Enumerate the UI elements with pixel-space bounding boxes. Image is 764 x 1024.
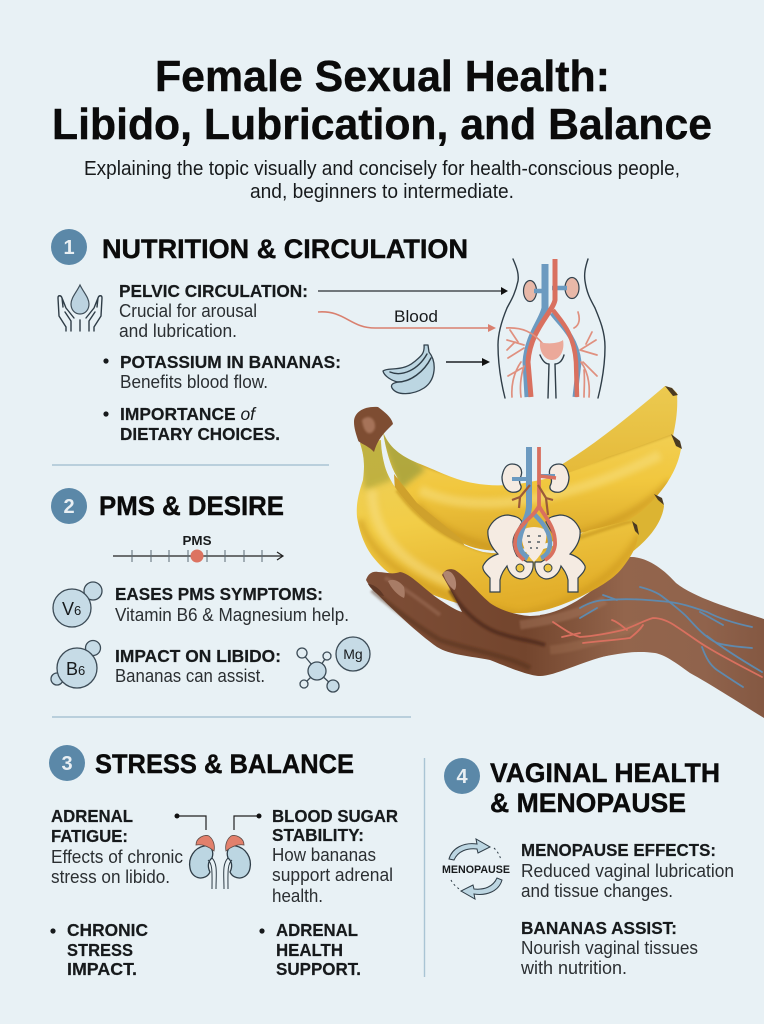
text: impact on libido: IMPACT ON LIBIDO: [115, 646, 281, 666]
text: adrenal fatigue [51, 806, 183, 887]
divider [424, 758, 426, 977]
subtitle: Explaining the topic visually and concisely for health-conscious people, [84, 158, 680, 180]
icon: magnesium molecule: Mg [343, 646, 363, 662]
timeline: pms marker: PMS [182, 533, 212, 548]
hand holding bananas [354, 386, 764, 718]
icon: vitamin V6: V6 [62, 599, 81, 619]
banana tips [665, 386, 678, 396]
arrow: banana to anatomy [446, 358, 490, 366]
text: pelvic circulation [119, 281, 308, 341]
section number 1: 1 [63, 237, 75, 259]
subtitle: and, beginners to intermediate. [250, 181, 514, 203]
bullet: importance of dietary choices: DIETARY CHOICES. [120, 424, 280, 444]
forearm and palm [540, 557, 764, 718]
icon: vitamin B6: B6 [66, 659, 85, 679]
text: adrenal fatigue: Effects of chronic [51, 847, 183, 867]
heading: vaginal health and menopause: VAGINAL HEALTH [490, 758, 720, 788]
text: blood sugar stability: STABILITY: [272, 825, 364, 845]
title: Female Sexual Health: [155, 52, 610, 101]
bullet: potassium in bananas: POTASSIUM IN BANANAS: [120, 352, 341, 372]
subtitle [84, 158, 680, 203]
text: menopause effects: and tissue changes. [521, 881, 673, 901]
bullet: importance of dietary choices: IMPORTANCE of [120, 404, 257, 424]
heading: vaginal health and menopause [490, 758, 720, 818]
bullet: adrenal health support: SUPPORT. [276, 959, 361, 979]
icon: water drop in hands [58, 285, 102, 331]
panel: nutrition and circulation [51, 229, 605, 444]
text: adrenal fatigue: FATIGUE: [51, 826, 128, 846]
text: menopause effects [521, 840, 734, 901]
bullet: chronic stress impact [50, 920, 148, 979]
second banana [375, 425, 681, 551]
text: pelvic circulation: and lubrication. [119, 321, 237, 341]
arrow: blood flow: Blood [394, 307, 438, 326]
banana crown [354, 407, 393, 452]
bullet: adrenal health support: HEALTH [276, 940, 343, 960]
icon: menopause cycle: MENOPAUSE [442, 864, 510, 876]
third banana [600, 495, 664, 552]
heading: pms and desire: PMS & DESIRE [99, 491, 284, 521]
text: adrenal fatigue: stress on libido. [51, 867, 170, 887]
panel: vaginal health and menopause [442, 758, 734, 978]
arrow: pelvic circulation to anatomy [318, 287, 508, 295]
diagram: pelvic anatomy [498, 259, 605, 398]
text: bananas assist: BANANAS ASSIST: [521, 918, 677, 938]
pelvic bones [483, 515, 533, 592]
bullet: chronic stress impact: IMPACT. [67, 959, 137, 979]
bullet: potassium in bananas [103, 352, 341, 392]
text: blood sugar stability: support adrenal [272, 865, 393, 885]
bullet: chronic stress impact: CHRONIC [67, 920, 148, 940]
text: pelvic circulation: PELVIC CIRCULATION: [119, 281, 308, 301]
bullet: potassium in bananas: Benefits blood flow. [120, 372, 268, 392]
title [52, 52, 712, 149]
icon: menopause cycle [442, 839, 510, 899]
heading: vaginal health and menopause: & MENOPAUSE [490, 788, 686, 818]
section number 4 [444, 758, 480, 794]
veins on forearm [553, 587, 762, 687]
divider [52, 464, 329, 466]
text: eases pms symptoms: Vitamin B6 & Magnesium help. [115, 605, 349, 625]
text: adrenal fatigue: ADRENAL [51, 806, 133, 826]
heading: nutrition and circulation: NUTRITION & CIRCULATION [102, 234, 468, 264]
text: blood sugar stability: How bananas [272, 845, 376, 865]
icon: vitamin V6 [53, 582, 102, 627]
text: bananas assist: Nourish vaginal tissues [521, 938, 698, 958]
text: blood sugar stability [272, 806, 398, 906]
fingernails [443, 571, 456, 590]
text: eases pms symptoms [115, 584, 349, 625]
front banana [355, 440, 640, 614]
icon: vitamin B6 [51, 640, 100, 688]
arrow: blood flow [318, 307, 496, 332]
text: menopause effects: Reduced vaginal lubrication [521, 861, 734, 881]
fingers and thumb [366, 569, 610, 676]
section number 3: 3 [61, 753, 73, 775]
diagram: pelvis and vessels overlay [483, 447, 585, 592]
text: blood sugar stability: health. [272, 886, 323, 906]
text: bananas assist: with nutrition. [520, 958, 627, 978]
sacrum dots [527, 536, 541, 548]
icon: kidneys and adrenal glands [174, 814, 262, 889]
bullet: adrenal health support: ADRENAL [276, 920, 358, 940]
text: impact on libido: Bananas can assist. [115, 666, 265, 686]
aorta and vena cava [512, 476, 555, 479]
text: blood sugar stability: BLOOD SUGAR [272, 806, 398, 826]
section number 1 [51, 229, 87, 265]
panel: pms and desire [51, 488, 370, 692]
section number 3 [49, 745, 85, 781]
bullet: chronic stress impact: STRESS [67, 940, 133, 960]
text: impact on libido [115, 646, 281, 686]
bullet: importance of dietary choices [103, 404, 280, 444]
heading: stress and balance: STRESS & BALANCE [95, 749, 354, 779]
panel: stress and balance [49, 745, 398, 979]
divider [52, 716, 411, 718]
hand shading [372, 578, 640, 668]
back banana [556, 386, 677, 495]
shadow between bananas [394, 474, 470, 554]
section number 2 [51, 488, 87, 524]
kidneys [502, 464, 522, 492]
text: pelvic circulation: Crucial for arousal [119, 301, 257, 321]
bullet: adrenal health support [259, 920, 361, 979]
icon: magnesium molecule [297, 637, 370, 692]
section number 4: 4 [456, 766, 468, 788]
title: Libido, Lubrication, and Balance [52, 100, 712, 149]
text: bananas assist [520, 918, 698, 978]
timeline: pms marker [113, 533, 283, 562]
section number 2: 2 [63, 496, 75, 518]
text: menopause effects: MENOPAUSE EFFECTS: [521, 840, 716, 860]
icon: banana bunch [383, 345, 434, 394]
text: eases pms symptoms: EASES PMS SYMPTOMS: [115, 584, 323, 604]
